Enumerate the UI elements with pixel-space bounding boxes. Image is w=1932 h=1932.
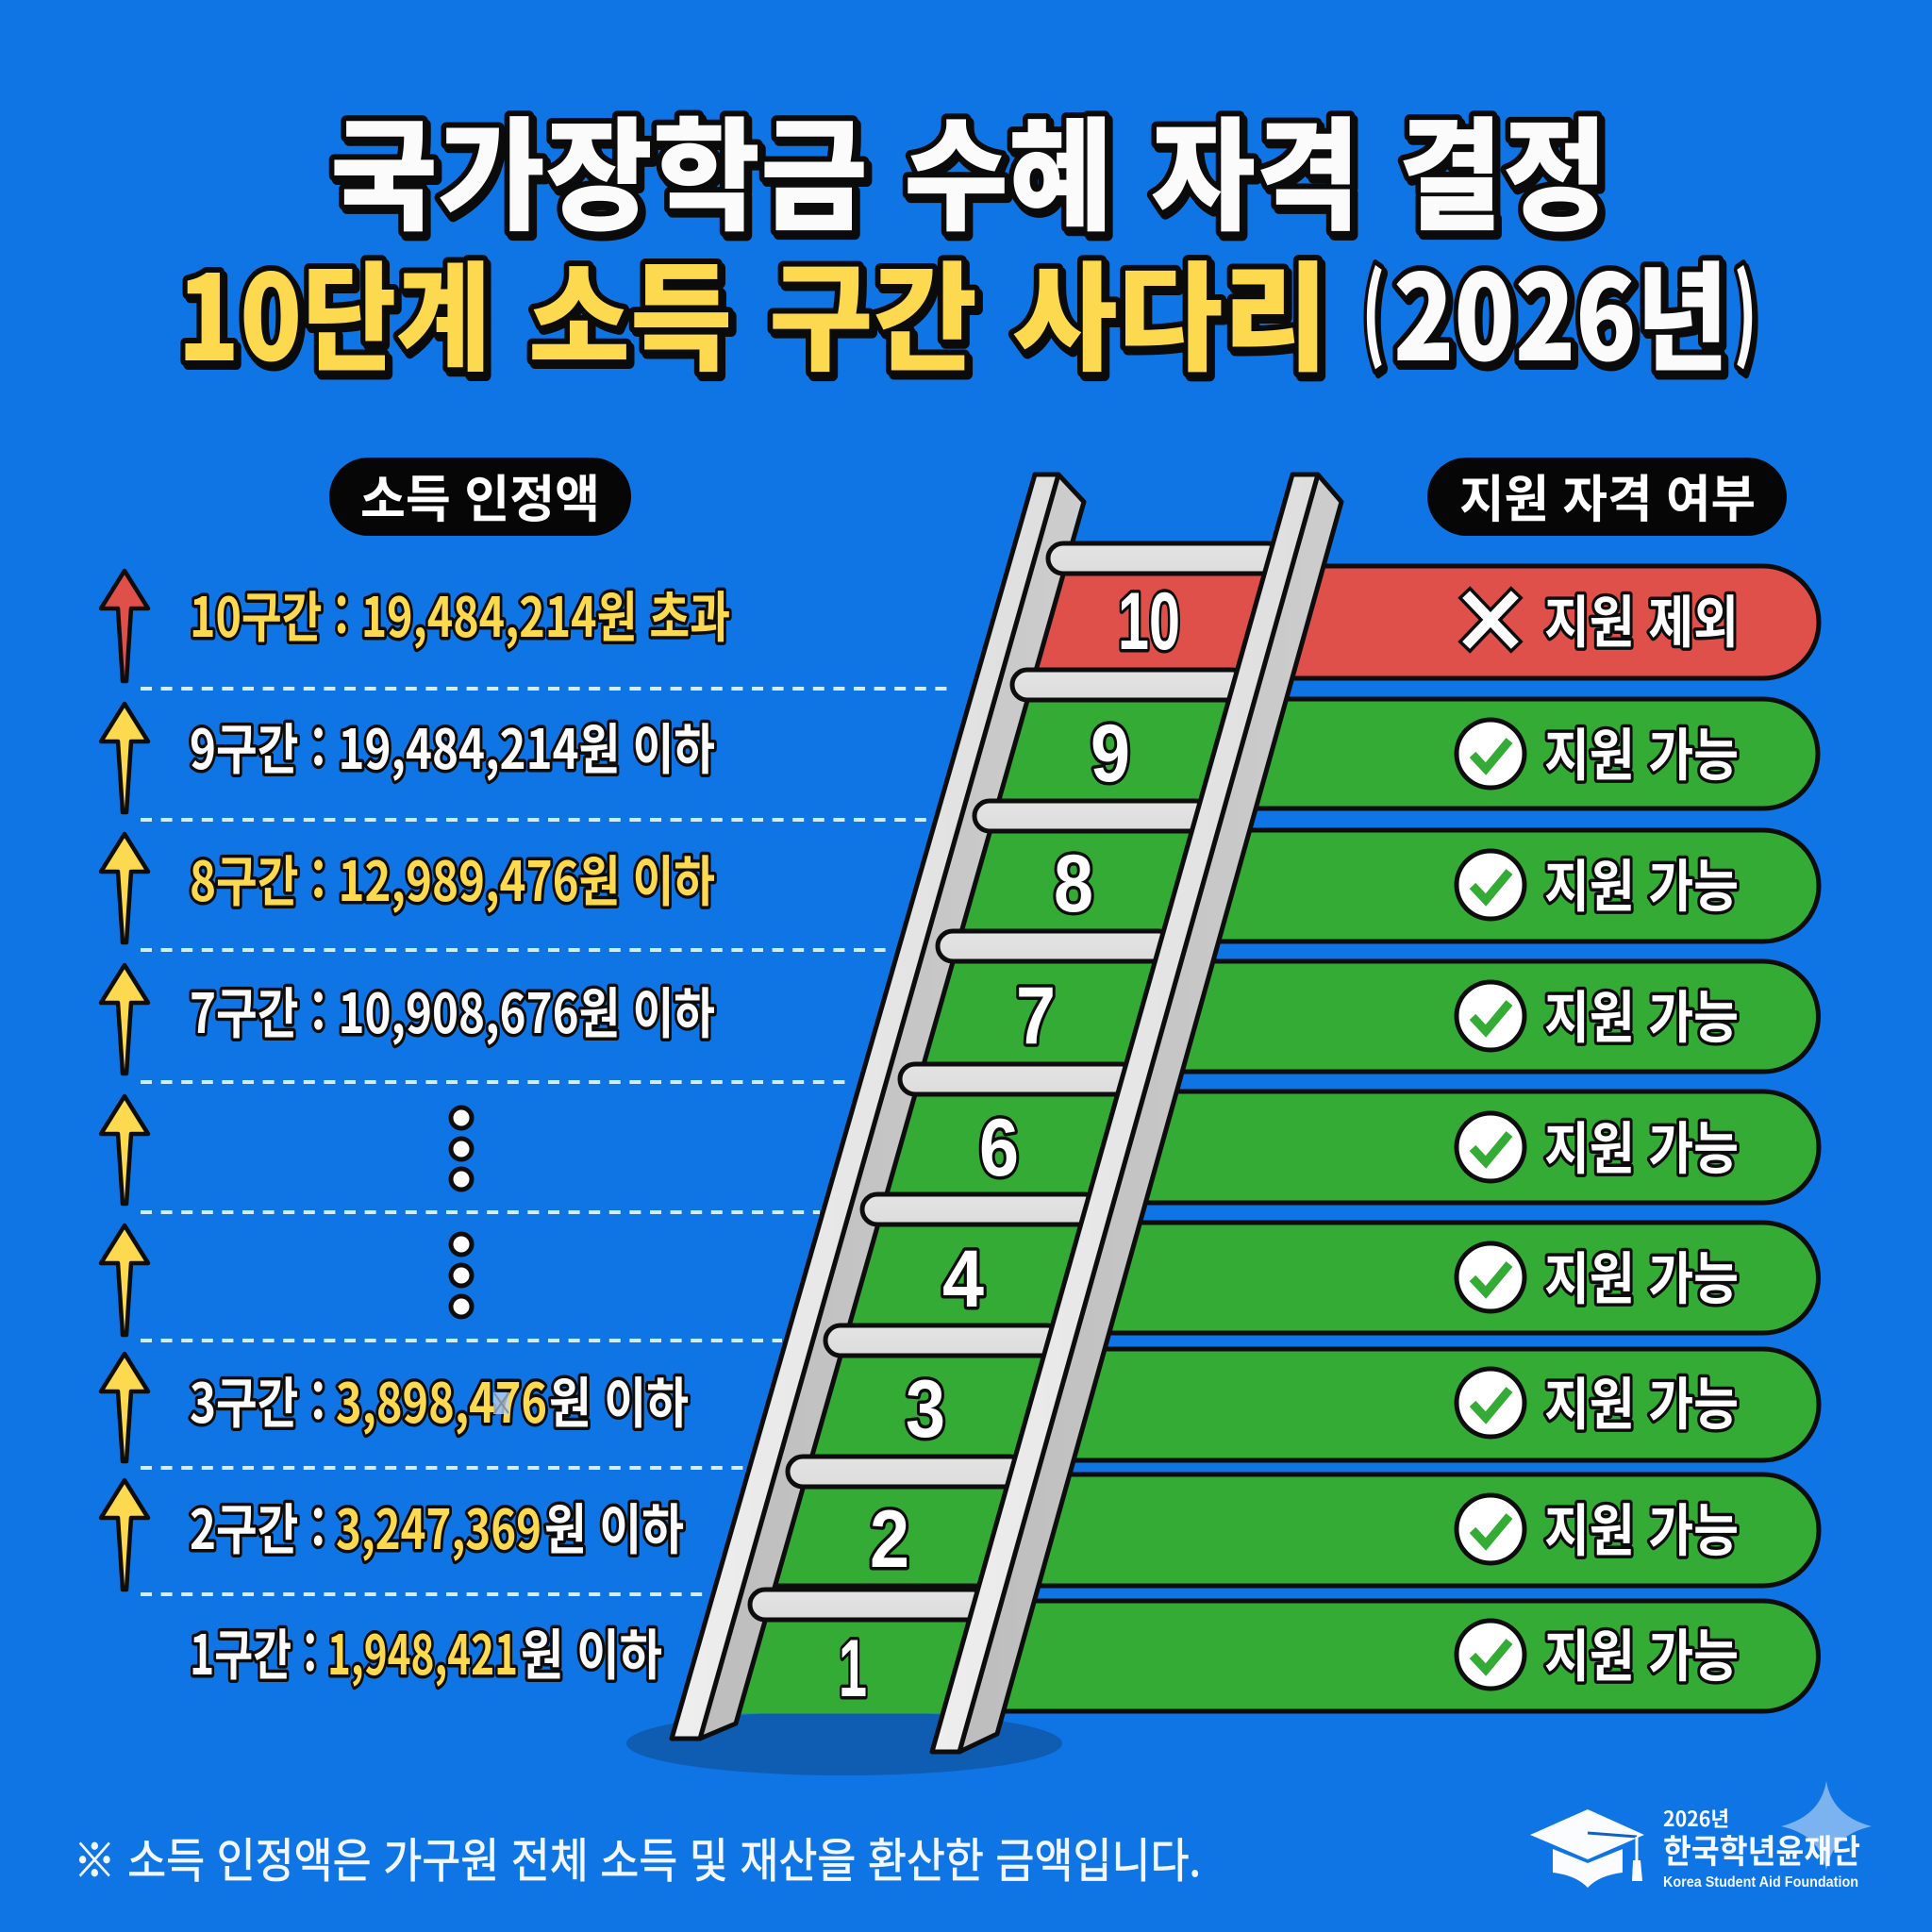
band 8 — [926, 830, 1819, 941]
status 6: eligible: 지원 가능 — [1544, 1104, 1739, 1186]
logo year: 2026년 — [1663, 1803, 1729, 1833]
arrow 9 — [101, 704, 148, 812]
income band 2 — [190, 1486, 684, 1565]
income band 2: 3,247,369 — [336, 1486, 541, 1565]
band 3 — [779, 1349, 1819, 1460]
right rail — [932, 475, 1341, 1752]
title line 2: 사다리 — [1012, 224, 1328, 394]
arrow 7 — [101, 965, 148, 1074]
number 1: 1 — [839, 1624, 867, 1714]
status 7: eligible: 지원 가능 — [1544, 973, 1739, 1055]
icon: graduation cap — [1530, 1809, 1644, 1888]
omitted band 6 dots — [451, 1108, 472, 1190]
title line 2: 10단계 — [177, 224, 491, 394]
status 4: eligible: 지원 가능 — [1544, 1234, 1739, 1316]
title line 1: 자격 — [1151, 78, 1360, 256]
number 2: 2 — [870, 1494, 909, 1585]
title line 1: 수혜 — [904, 78, 1113, 256]
title line 2: 구간 — [769, 224, 977, 394]
arrow 3 — [101, 1354, 148, 1461]
arrow 2 — [101, 1480, 148, 1590]
income band 3: 3,898,476 — [336, 1359, 547, 1439]
status 9: eligible: 지원 가능 — [1544, 710, 1739, 792]
status 2: eligible: 지원 가능 — [1544, 1486, 1739, 1568]
arrow 6 — [101, 1096, 148, 1204]
number 4: 4 — [942, 1234, 984, 1324]
status 4: eligible — [1457, 1234, 1739, 1316]
omitted band 5 dots — [451, 1234, 472, 1317]
income band 7: 7구간 : 10,908,676원 이하 — [190, 970, 715, 1049]
status labels — [1457, 577, 1739, 1693]
number 8: 8 — [1054, 839, 1093, 929]
income band 1 — [190, 1611, 662, 1690]
income band 3 — [190, 1359, 689, 1439]
status 1: eligible: 지원 가능 — [1544, 1611, 1739, 1693]
income band 2: 원 이하 — [544, 1486, 684, 1565]
income band 1: 1,948,421 — [327, 1611, 518, 1690]
income band 2: 2구간 : — [190, 1486, 325, 1565]
status 10: excluded: 지원 제외 — [1544, 577, 1739, 659]
icon: sparkle — [1781, 1781, 1872, 1871]
header pill: income: 소득 인정액 — [360, 458, 600, 532]
logo english name: Korea Student Aid Foundation — [1663, 1874, 1858, 1890]
income band 8: 8구간 : 12,989,476원 이하 — [190, 838, 715, 917]
title line 2 — [177, 224, 1757, 394]
status 6: eligible — [1457, 1104, 1739, 1186]
left rail — [672, 475, 1084, 1739]
income band 9: 9구간 : 19,484,214원 이하 — [190, 706, 715, 785]
arrow 10 (red) — [101, 571, 148, 681]
band 7 — [889, 961, 1819, 1072]
ladder base shadow — [626, 1711, 1062, 1775]
band 2 — [743, 1474, 1819, 1586]
title line 2: ) — [1734, 241, 1757, 384]
number 3: 3 — [906, 1364, 945, 1455]
band 4 — [815, 1223, 1819, 1333]
title line 2: 2026년 — [1393, 224, 1728, 394]
logo name: 한국학년윤재단 — [1663, 1825, 1860, 1874]
status 3: eligible: 지원 가능 — [1544, 1359, 1739, 1441]
header pill: eligibility: 지원 자격 여부 — [1459, 458, 1756, 532]
income labels — [190, 574, 730, 1690]
status 1: eligible — [1457, 1611, 1739, 1693]
income band 3: 3구간 : — [190, 1359, 325, 1439]
logo — [1530, 1781, 1872, 1890]
arrow 5 — [101, 1225, 148, 1335]
number 10: 10 — [1118, 576, 1180, 667]
footnote: ※ 소득 인정액은 가구원 전체 소득 및 재산을 환산한 금액입니다. — [74, 1824, 1201, 1891]
number 6: 6 — [979, 1103, 1019, 1193]
number 7: 7 — [1016, 971, 1056, 1061]
ladder — [672, 475, 1341, 1752]
title — [177, 78, 1757, 394]
income band 1: 1구간 : — [190, 1611, 317, 1690]
status bands — [708, 566, 1819, 1711]
status 8: eligible — [1457, 841, 1739, 924]
income band 10: 10구간 : 19,484,214원 초과 — [190, 574, 730, 653]
status 10: excluded — [1470, 577, 1739, 659]
arrows — [101, 571, 148, 1590]
title line 1 — [330, 78, 1607, 256]
income band 3: 원 이하 — [549, 1359, 689, 1439]
band 9 — [964, 699, 1818, 808]
title line 1: 결정 — [1398, 78, 1607, 256]
band 6 — [852, 1091, 1819, 1203]
status 3: eligible — [1457, 1359, 1739, 1441]
status 7: eligible — [1457, 973, 1739, 1055]
status 8: eligible: 지원 가능 — [1544, 841, 1739, 924]
arrow 8 — [101, 834, 148, 942]
status 9: eligible — [1457, 710, 1739, 792]
income band 1: 원 이하 — [521, 1611, 662, 1690]
rungs — [750, 543, 1283, 1620]
status 2: eligible — [1457, 1486, 1739, 1568]
number 9: 9 — [1091, 708, 1130, 799]
band 10 — [1001, 566, 1819, 678]
title line 2: 소득 — [528, 224, 732, 394]
title line 2: ( — [1362, 241, 1385, 384]
band numbers — [839, 576, 1180, 1714]
band 1 — [708, 1601, 1819, 1711]
title line 1: 국가장학금 — [330, 78, 868, 256]
